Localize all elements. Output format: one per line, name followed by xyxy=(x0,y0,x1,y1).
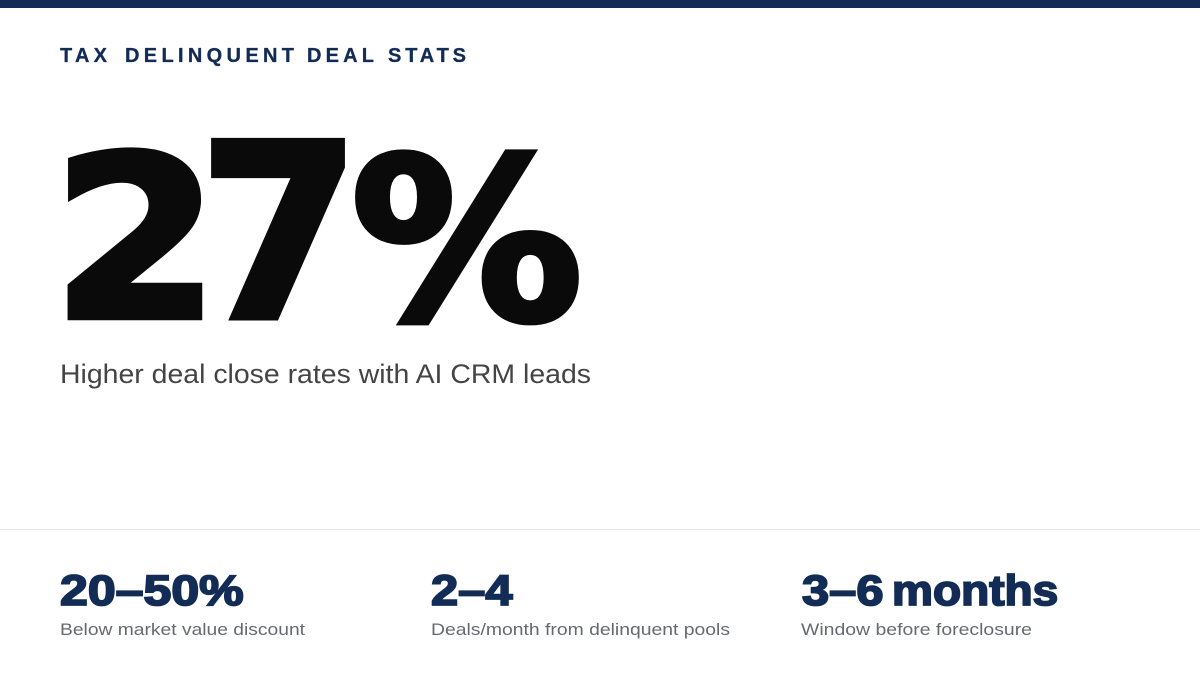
value: 3–6 months xyxy=(802,567,1058,615)
big stat: 27%: 2 xyxy=(52,109,220,370)
heading: TAX xyxy=(60,45,108,67)
heading: DEAL xyxy=(307,45,374,67)
heading: STATS xyxy=(388,45,466,67)
stat: foreclosure window xyxy=(801,567,1058,639)
label: below market value discount: Below market value discount xyxy=(60,620,305,639)
big stat: 27% xyxy=(52,94,583,374)
value: 3–6 months: months xyxy=(892,568,1058,615)
value: 3–6 months: 3–6 xyxy=(802,567,884,614)
top accent bar xyxy=(0,0,1200,8)
value: 20–50%: 20–50% xyxy=(60,567,244,614)
stat: below market discount xyxy=(60,567,305,639)
big stat: 27%: 7 xyxy=(199,94,360,374)
value: 2–4: 2–4 xyxy=(431,567,513,614)
heading: DELINQUENT xyxy=(125,45,294,67)
label: deals per month from delinquent pools: Deals/month from delinquent pools xyxy=(431,620,730,639)
stat: deals per month xyxy=(431,567,730,639)
divider xyxy=(0,529,1200,530)
big stat: 27%: % xyxy=(351,111,583,372)
stat description: Higher deal close rates with AI CRM leads xyxy=(60,359,591,389)
heading xyxy=(60,45,466,67)
label: window before foreclosure: Window before foreclosure xyxy=(801,620,1032,639)
